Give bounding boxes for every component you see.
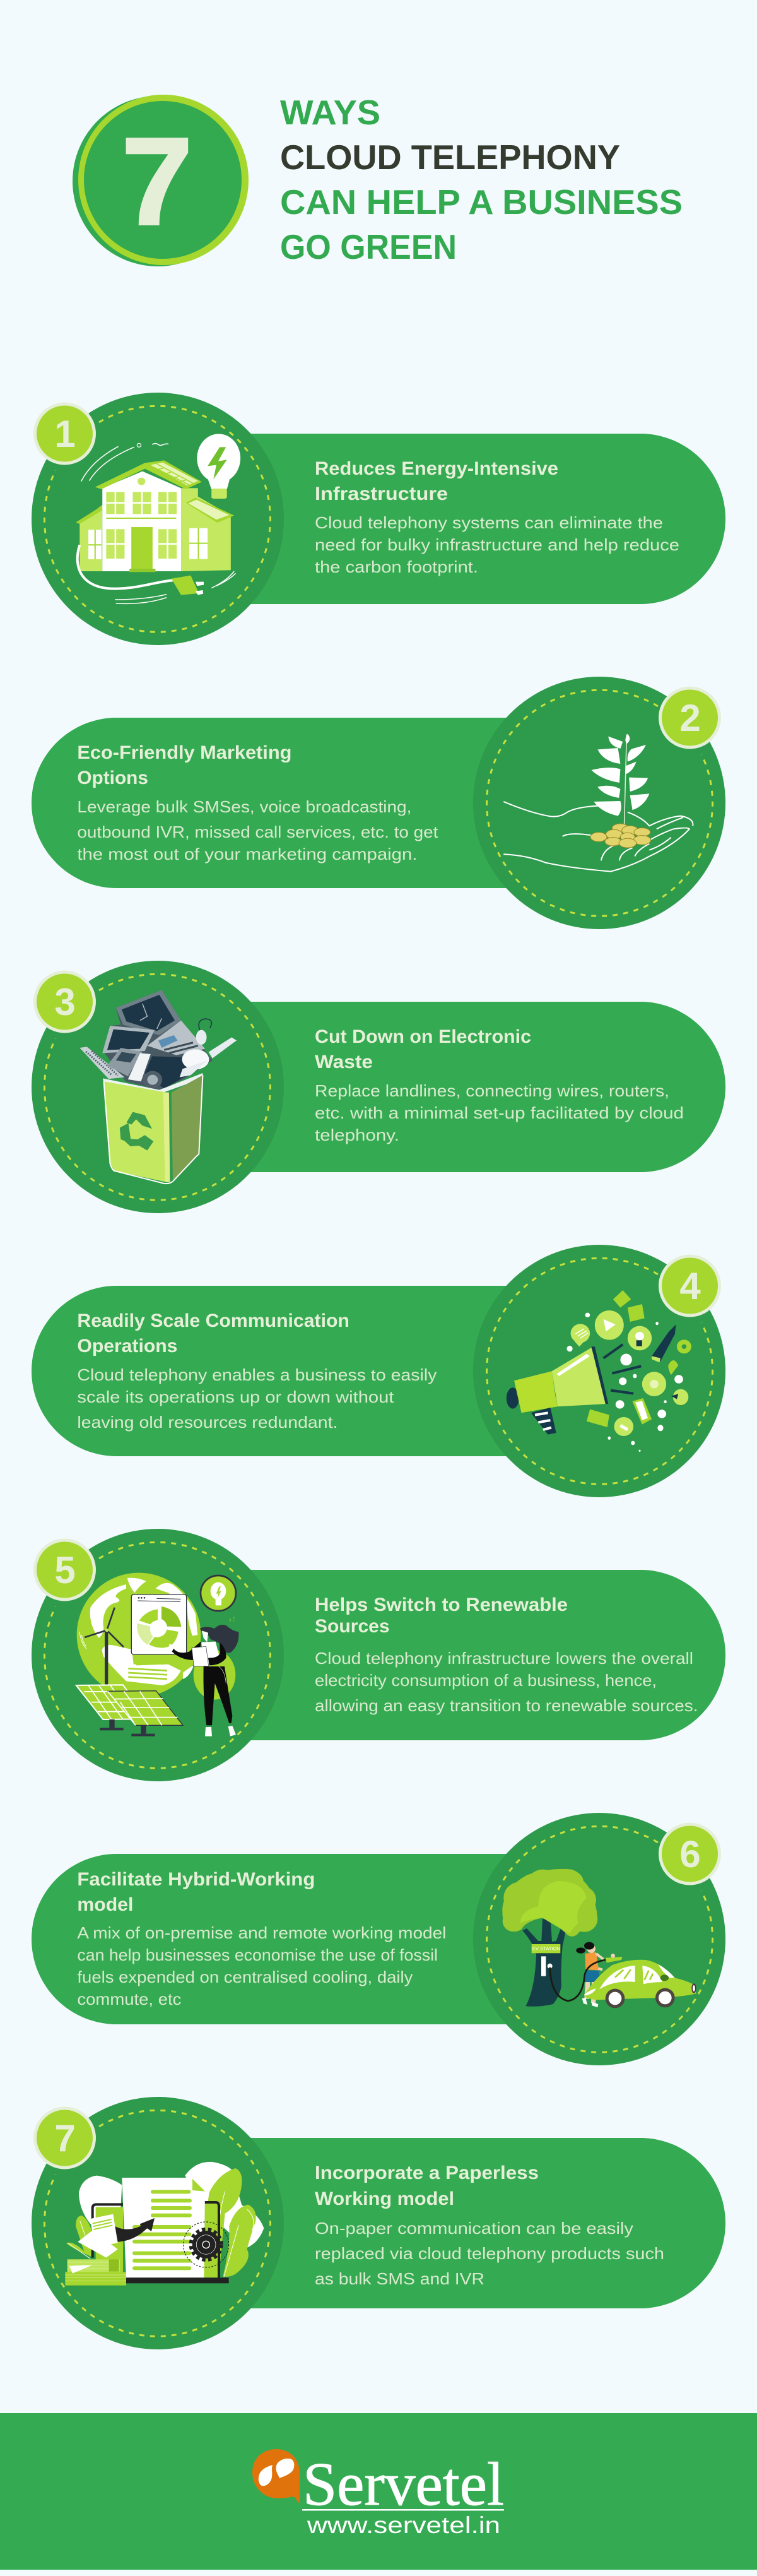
body text [77, 1923, 446, 2009]
icon: green house with solar panels and plug [76, 434, 240, 603]
heading: Cut Down on Electronic [315, 1026, 531, 1047]
title: CAN HELP A BUSINESS [280, 182, 683, 222]
heading: model [77, 1894, 133, 1915]
body text: A mix of on-premise and remote working model [77, 1923, 446, 1942]
number badge 4: 4 [679, 1265, 701, 1307]
body text [315, 513, 679, 576]
body text: outbound IVR, missed call services, etc. to get [77, 822, 438, 841]
header [73, 93, 683, 266]
body text [315, 1649, 698, 1715]
heading [77, 1310, 349, 1356]
body text: need for bulky infrastructure and help reduce [315, 535, 679, 554]
body text: as bulk SMS and IVR [315, 2269, 484, 2288]
panel: way 3 [32, 961, 725, 1213]
body text: Replace landlines, connecting wires, routers, [315, 1081, 669, 1100]
body text: Cloud telephony systems can eliminate the [315, 513, 663, 532]
heading: Helps Switch to Renewable [315, 1594, 568, 1615]
heading: Operations [77, 1336, 177, 1356]
heading: Incorporate a Paperless [315, 2163, 539, 2183]
body text: commute, etc [77, 1990, 181, 2009]
icon: EV station tree and green car [502, 1869, 696, 2008]
footer [0, 2413, 757, 2570]
panel: way 5 [32, 1529, 725, 1781]
body text: telephony. [315, 1125, 399, 1144]
body text: Leverage bulk SMSes, voice broadcasting, [77, 797, 411, 816]
icon: Servetel speech bubble logo [252, 2449, 300, 2504]
number badge 5: 5 [54, 1549, 76, 1591]
heading: Eco-Friendly Marketing [77, 742, 291, 763]
brand name: Servetel [303, 2450, 504, 2519]
number badge 1: 1 [54, 413, 76, 455]
heading [315, 1026, 531, 1072]
header number badge: 7 [122, 112, 192, 251]
icon: megaphone with marketing icons [507, 1290, 691, 1452]
heading: Sources [315, 1616, 390, 1637]
body text: fuels expended on centralised cooling, daily [77, 1968, 413, 1986]
number badge 5 [35, 1540, 95, 1600]
body text [315, 1081, 684, 1144]
body text: the carbon footprint. [315, 557, 478, 576]
body text: leaving old resources redundant. [77, 1413, 337, 1432]
icon: paperless document on laptop [65, 2162, 264, 2286]
panel: way 7 [32, 2097, 725, 2349]
panel: way 4 [32, 1245, 725, 1497]
heading [315, 1594, 568, 1637]
icon: hands holding plant and coins [503, 734, 693, 872]
number badge 4 [660, 1256, 719, 1315]
body text [315, 2219, 664, 2288]
body text: allowing an easy transition to renewable sources. [315, 1696, 698, 1715]
panel: way 1 [32, 393, 725, 645]
heading [315, 2163, 539, 2209]
icon: renewable energy with globe, turbine, panels and woman [76, 1573, 238, 1736]
number badge 6 [660, 1824, 719, 1884]
body text: Cloud telephony enables a business to easily [77, 1365, 437, 1384]
number badge 6: 6 [679, 1833, 701, 1875]
body text: etc. with a minimal set-up facilitated by cloud [315, 1103, 684, 1122]
body text: the most out of your marketing campaign. [77, 845, 417, 864]
website url: www.servetel.in [307, 2512, 500, 2538]
icon: EV station tree and green car: EV STATION [532, 1945, 560, 1951]
icon: recycling bin with electronic waste [79, 990, 237, 1184]
body text: scale its operations up or down without [77, 1387, 394, 1406]
number badge 7 [35, 2108, 95, 2168]
number badge 2: 2 [679, 697, 701, 739]
body text [77, 797, 438, 864]
title: GO GREEN [280, 227, 457, 266]
heading [77, 1869, 315, 1915]
title: WAYS [280, 93, 380, 132]
heading: Facilitate Hybrid-Working [77, 1869, 315, 1890]
heading [315, 458, 558, 504]
heading [77, 742, 291, 788]
heading: Infrastructure [315, 484, 448, 504]
heading: Working model [315, 2188, 454, 2209]
heading: Options [77, 768, 148, 788]
heading: Waste [315, 1052, 373, 1072]
body text: On-paper communication can be easily [315, 2219, 633, 2238]
number badge 2 [660, 688, 719, 747]
number badge 1 [35, 404, 95, 463]
panel: way 2 [32, 677, 725, 929]
body text [77, 1365, 437, 1432]
header number badge [73, 95, 249, 266]
body text: replaced via cloud telephony products such [315, 2244, 664, 2263]
body text: Cloud telephony infrastructure lowers the overall [315, 1649, 693, 1668]
number badge 3 [35, 972, 95, 1031]
body text: can help businesses economise the use of fossil [77, 1945, 438, 1964]
number badge 7: 7 [54, 2117, 76, 2159]
heading: Reduces Energy-Intensive [315, 458, 558, 479]
body text: electricity consumption of a business, hence, [315, 1671, 657, 1690]
title: CLOUD TELEPHONY [280, 138, 620, 177]
number badge 3: 3 [54, 981, 76, 1023]
heading: Readily Scale Communication [77, 1310, 349, 1331]
title [280, 93, 683, 266]
panel: way 6 [32, 1813, 725, 2065]
